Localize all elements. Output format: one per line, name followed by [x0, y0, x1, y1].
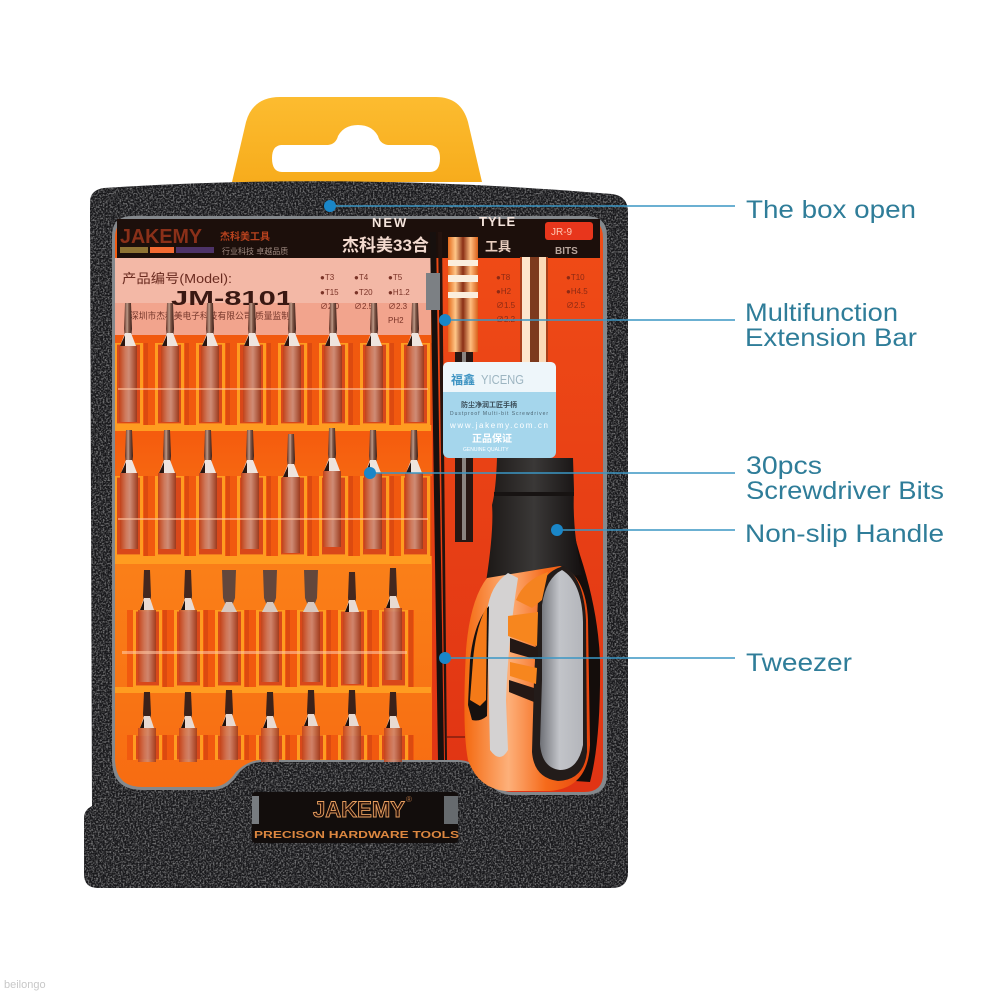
- callout: screwdriver bits: 30pcs: [746, 452, 822, 480]
- model information card: JM-8101: [171, 288, 293, 310]
- callout: extension bar: Extension Bar: [745, 324, 917, 352]
- model information card: PH2: [388, 316, 404, 325]
- product label sticker: www.jakemy.com.cn: [449, 421, 548, 430]
- callout: the box open: The box open: [746, 196, 916, 224]
- model information card: ●T3: [320, 273, 335, 282]
- screwdriver shaft: [520, 257, 548, 462]
- model information card: ●T4: [354, 273, 369, 282]
- header band with brand: BITS: [555, 246, 578, 257]
- callout: screwdriver bits: [364, 452, 944, 505]
- header band with brand: TYLE: [479, 214, 516, 229]
- model information card: ∅2.5: [354, 302, 374, 311]
- panel: left bit tray: [115, 219, 432, 787]
- retaining strips: [118, 388, 428, 654]
- header band with brand: 行业科技 卓越品质: [222, 246, 288, 256]
- callout: screwdriver bits: Screwdriver Bits: [746, 477, 944, 505]
- header band with brand: 工具: [485, 239, 511, 254]
- screwdriver grey grip: [468, 566, 587, 781]
- right tray price table: ∅2.5: [566, 301, 586, 310]
- bottom brand plate: JAKEMY: [313, 797, 405, 822]
- right tray price table: ●H2: [496, 287, 512, 296]
- callout: extension bar: Multifunction: [745, 299, 898, 327]
- bottom brand plate: ®: [406, 795, 412, 804]
- model information card: ●T5: [388, 273, 403, 282]
- right tray price table: ∅1.5: [496, 301, 516, 310]
- header band with brand: NEW: [372, 215, 408, 230]
- product label sticker: Dustproof Multi-bit Screwdriver: [450, 411, 548, 417]
- right tray price table: [496, 273, 588, 324]
- screwdriver orange body: [464, 566, 590, 791]
- model information card: ●T15: [320, 288, 339, 297]
- product label sticker: 福鑫: [451, 372, 475, 387]
- callout: extension bar: [439, 299, 917, 352]
- panel: right driver tray: [432, 219, 603, 792]
- panel: black toolbox: [84, 178, 629, 890]
- right tray price table: ●T8: [496, 273, 511, 282]
- header band with brand: JAKEMY: [120, 226, 203, 248]
- header band with brand: 杰科美工具: [220, 230, 270, 243]
- bottom brand plate: PRECISON HARDWARE TOOLS: [254, 829, 459, 841]
- right tray price table: ●H4.5: [566, 287, 588, 296]
- handle shadow on tray: [540, 458, 600, 782]
- product label sticker: YICENG: [481, 372, 524, 387]
- callout: the box open: [324, 196, 916, 224]
- header band with brand: 杰科美33合: [342, 235, 429, 255]
- callout: non-slip handle: [551, 520, 944, 548]
- right tray price table: ∅2.2: [496, 315, 516, 324]
- extension bar: [448, 237, 478, 542]
- right tray price table: ●T10: [566, 273, 585, 282]
- model information card: ●T20: [354, 288, 373, 297]
- product label sticker: [443, 362, 556, 458]
- model information card: ∅2.0: [320, 302, 340, 311]
- model information card: 产品编号(Model):: [122, 271, 232, 286]
- panel: open tray frame: [112, 216, 607, 795]
- watermark: beilongo: [4, 979, 46, 991]
- callout: tweezer: Tweezer: [746, 649, 852, 677]
- screwdriver bits: 30 pieces in four rows: [119, 303, 424, 762]
- tray slots: four rows: [108, 335, 436, 760]
- bottom brand plate: [252, 792, 459, 843]
- screwdriver: [447, 257, 600, 791]
- header band with brand: [117, 214, 600, 258]
- callout: tweezer: [439, 649, 852, 677]
- header band with brand: JR-9: [551, 227, 573, 238]
- product label sticker: GENUINE QUALITY: [463, 447, 509, 453]
- tweezer: [426, 232, 447, 760]
- model information card: ∅2.3: [388, 302, 408, 311]
- icon: yellow carrying handle: [232, 97, 482, 182]
- product label sticker: 防尘净润工匠手柄: [461, 400, 517, 409]
- screwdriver black neck: [486, 458, 582, 582]
- model information card: [115, 258, 431, 335]
- product label sticker: 正品保证: [472, 432, 512, 445]
- model information card: 深圳市杰科美电子科技有限公司 质量监制: [130, 310, 290, 321]
- callout: non-slip handle: Non-slip Handle: [745, 520, 944, 548]
- model information card: ●H1.2: [388, 288, 410, 297]
